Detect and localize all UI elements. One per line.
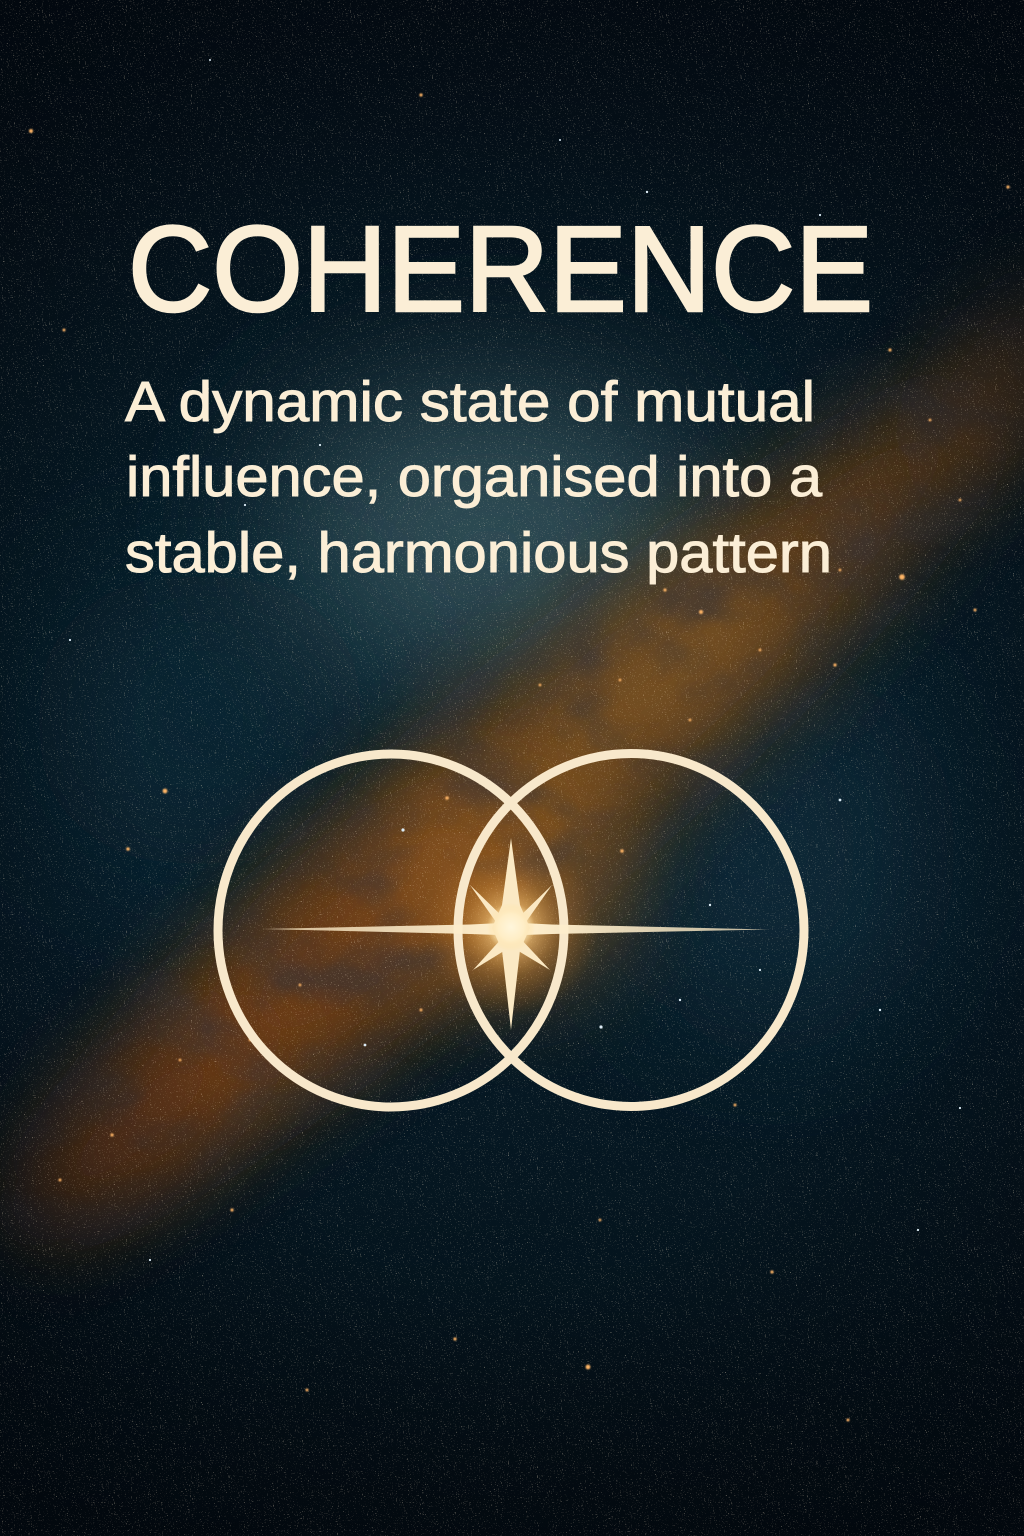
icon: two overlapping circles with central star [218,754,804,1107]
title: COHERENCE [128,201,873,337]
subtitle: A dynamic state of mutual [125,370,815,434]
central glow [423,840,599,1016]
subtitle: stable, harmonious pattern [125,521,832,585]
star core [487,903,535,951]
left circle [218,754,564,1107]
eight-point star [470,838,552,1030]
subtitle: influence, organised into a [126,445,822,509]
right circle [458,754,804,1106]
horizontal light beam [262,922,770,936]
subtitle [125,370,832,585]
